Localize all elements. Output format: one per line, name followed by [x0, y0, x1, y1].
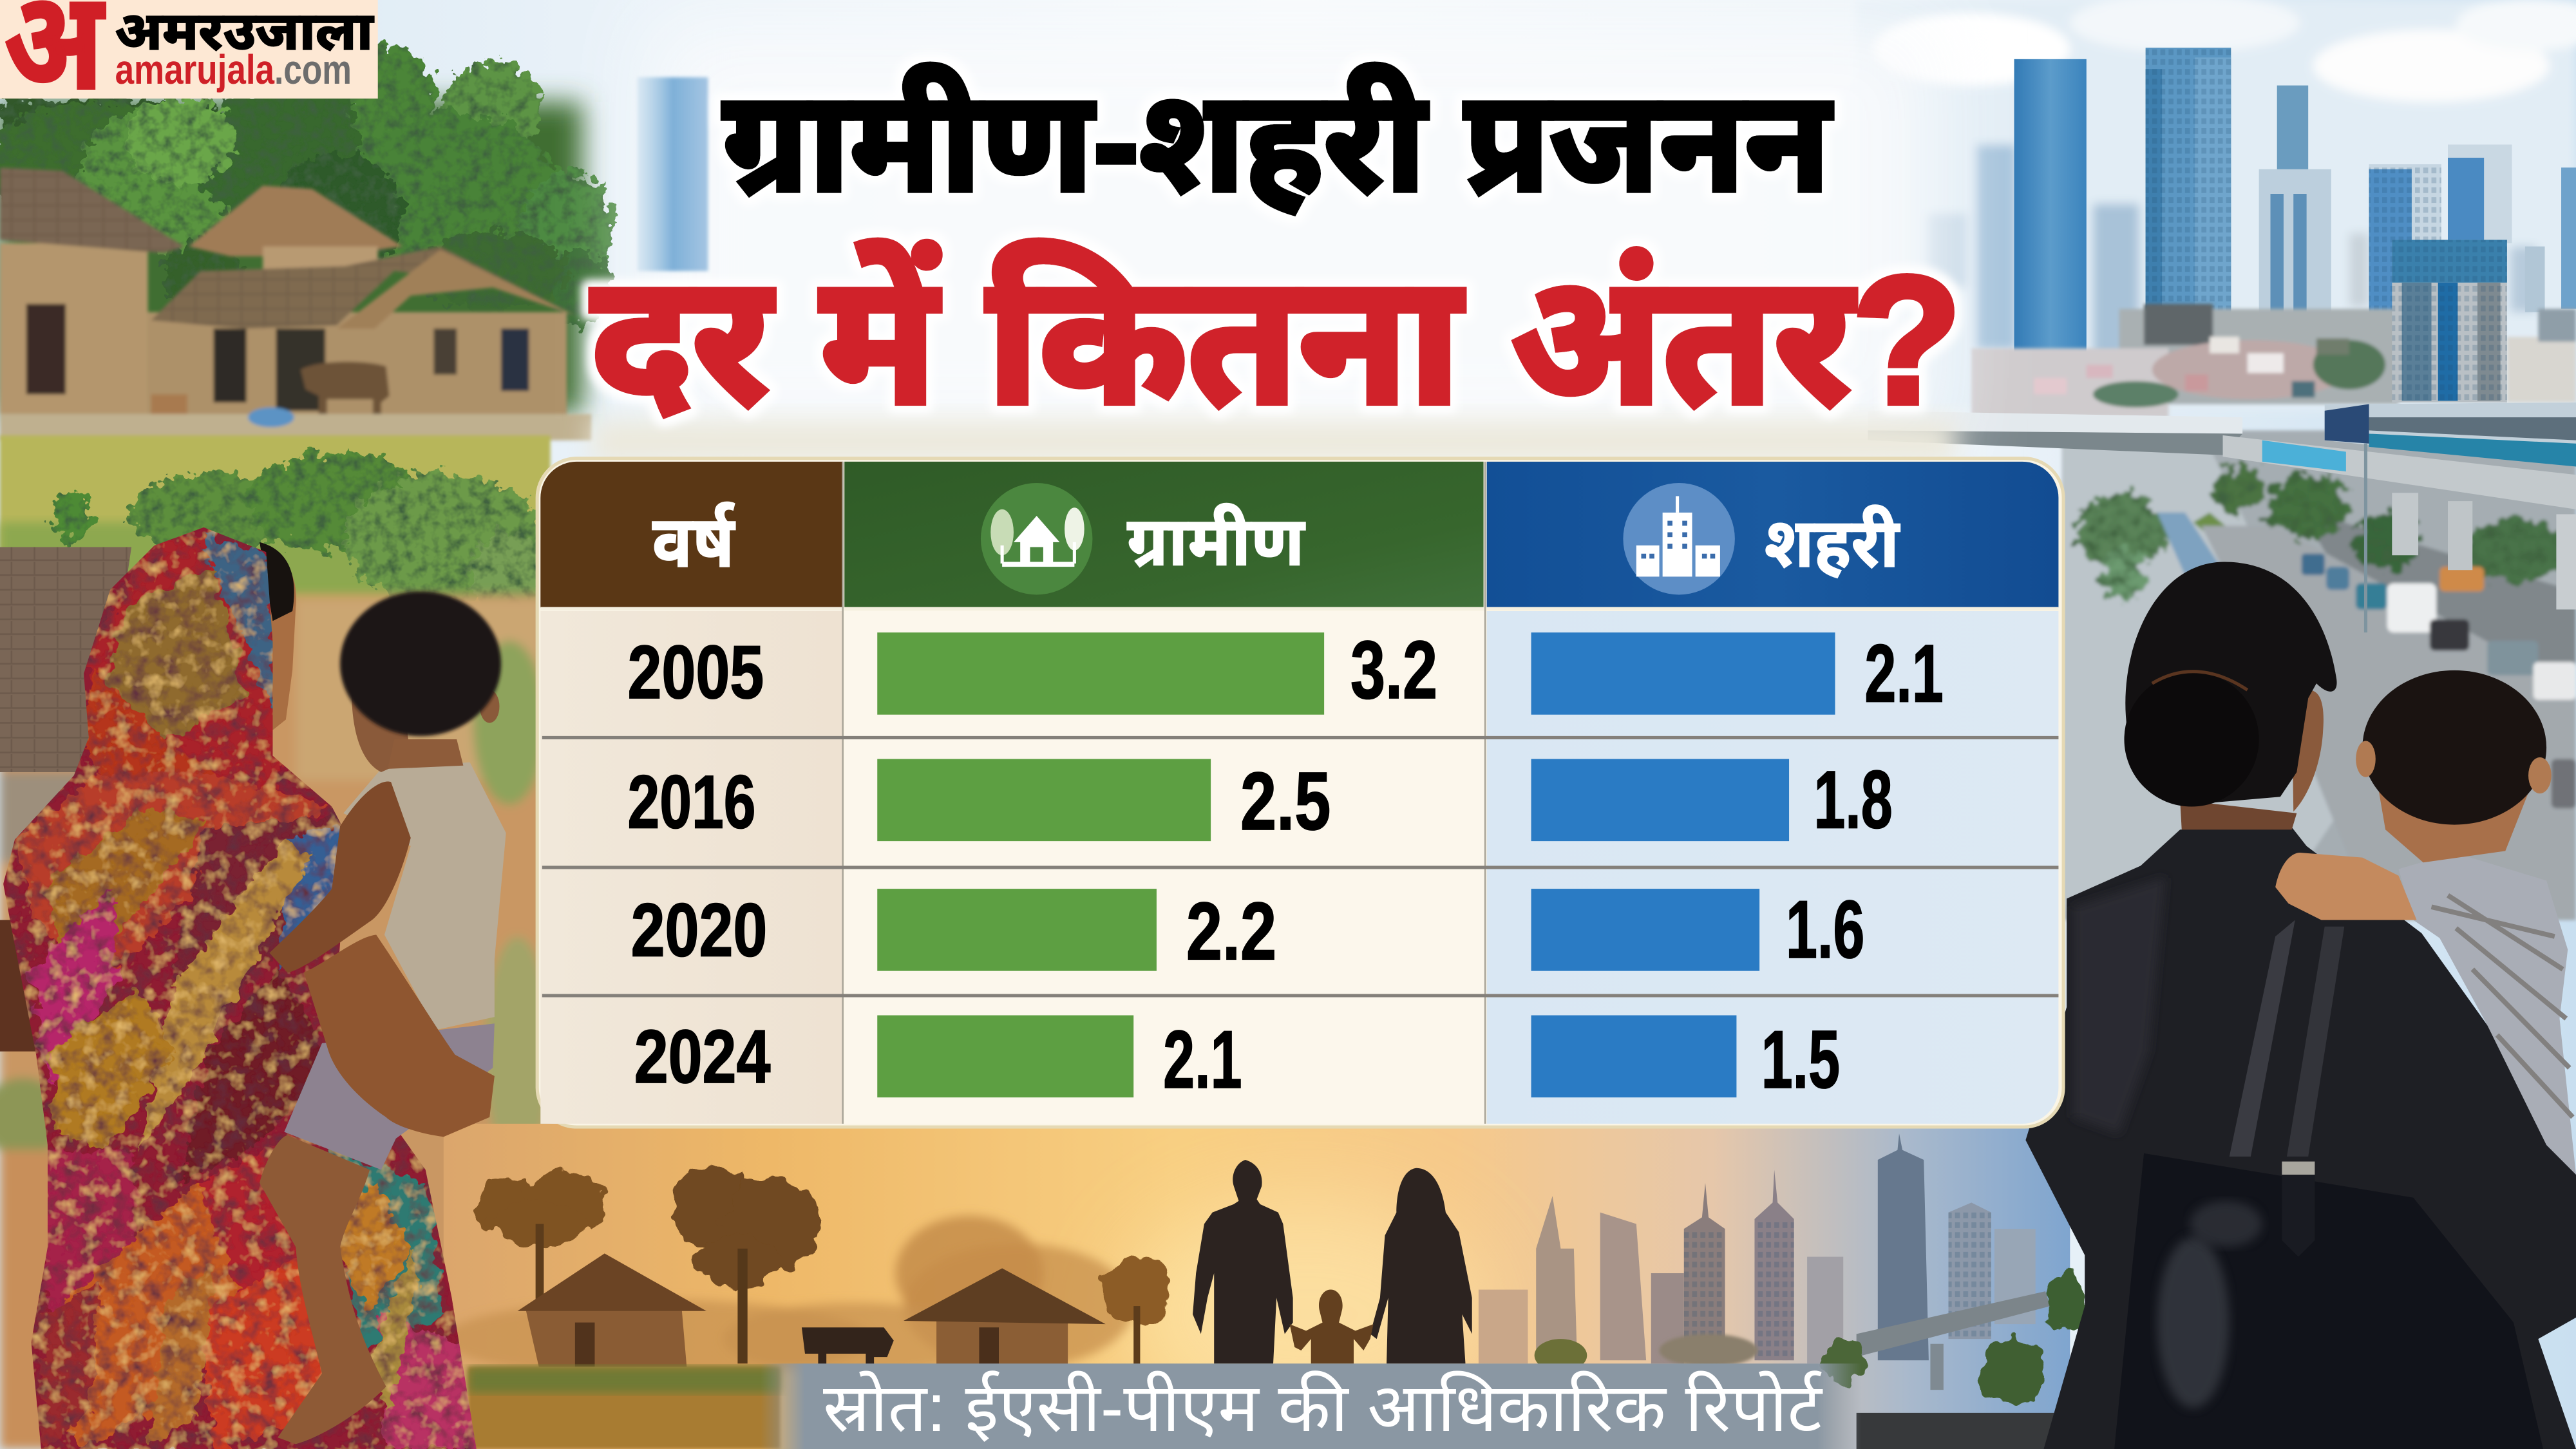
scene: rural silhouettes: [444, 1168, 1170, 1449]
table: fertility rates: [537, 459, 2063, 1127]
logo: Amar Ujala: अमरउजाला: [115, 3, 374, 61]
scene: sandy ground behind rural mother: [0, 547, 551, 1449]
scene: city skyline: [1857, 0, 2576, 417]
row: 2020: [631, 884, 1864, 978]
label: urban: शहरी: [1765, 504, 1900, 582]
row: 2016: [627, 755, 1893, 848]
row: 2024: 2.1: [1163, 1014, 1242, 1106]
scene: central faded sky behind title: [649, 17, 1938, 447]
scene: faded tower: [638, 77, 708, 271]
logo: Amar Ujala: .com: [274, 46, 352, 93]
title: line two: दर में कितना अंतर?: [591, 239, 1962, 441]
row: 2016: 2.5: [1240, 756, 1331, 848]
row: 2024: 2024: [634, 1014, 770, 1099]
row: 2020: 2.2: [1186, 886, 1276, 978]
row: 2005: 2.1: [1864, 628, 1944, 719]
figure: rural mother in colourful sari: [0, 518, 506, 1449]
scene: haze band above table: [591, 421, 1955, 463]
figure: urban mother with handbag: [2025, 562, 2576, 1449]
header: urban cell: [1487, 462, 2058, 608]
header: year cell: [540, 462, 843, 608]
row: 2005: 3.2: [1350, 625, 1437, 716]
row: 2005: [627, 625, 1944, 719]
header: year cell: वर्ष: [652, 501, 736, 582]
logo: Amar Ujala: [0, 0, 378, 118]
row: 2024: 1.5: [1761, 1014, 1840, 1106]
scene: village with huts and trees: [0, 44, 613, 440]
header: rural cell: [844, 462, 1484, 608]
row: 2016: 2016: [627, 760, 755, 844]
row: 2020: 2020: [631, 888, 767, 972]
scene: road, trees and metro: [1868, 402, 2576, 920]
row: 2016: 1.8: [1814, 755, 1893, 846]
row: 2005: 2005: [627, 630, 764, 714]
scene: sunset strip: [444, 1124, 2070, 1449]
source bar: स्रोत: ईएसी-पीएम की आधिकारिक रिपोर्ट: [823, 1370, 1823, 1446]
label: rural: ग्रामीण: [1127, 503, 1305, 580]
icon: house and trees: [981, 483, 1092, 594]
scene: urban skyline silhouettes: [1479, 1133, 2083, 1449]
silhouette: family holding hands: [1193, 1160, 1472, 1363]
logo: Amar Ujala: amarujala: [115, 46, 274, 93]
icon: city buildings: [1623, 483, 1735, 594]
row: 2024: [634, 1014, 1840, 1106]
scene: green field and crops: [0, 435, 551, 624]
row: 2020: 1.6: [1786, 884, 1864, 976]
title: line one: ग्रामीण-शहरी प्रजनन: [723, 63, 1833, 221]
